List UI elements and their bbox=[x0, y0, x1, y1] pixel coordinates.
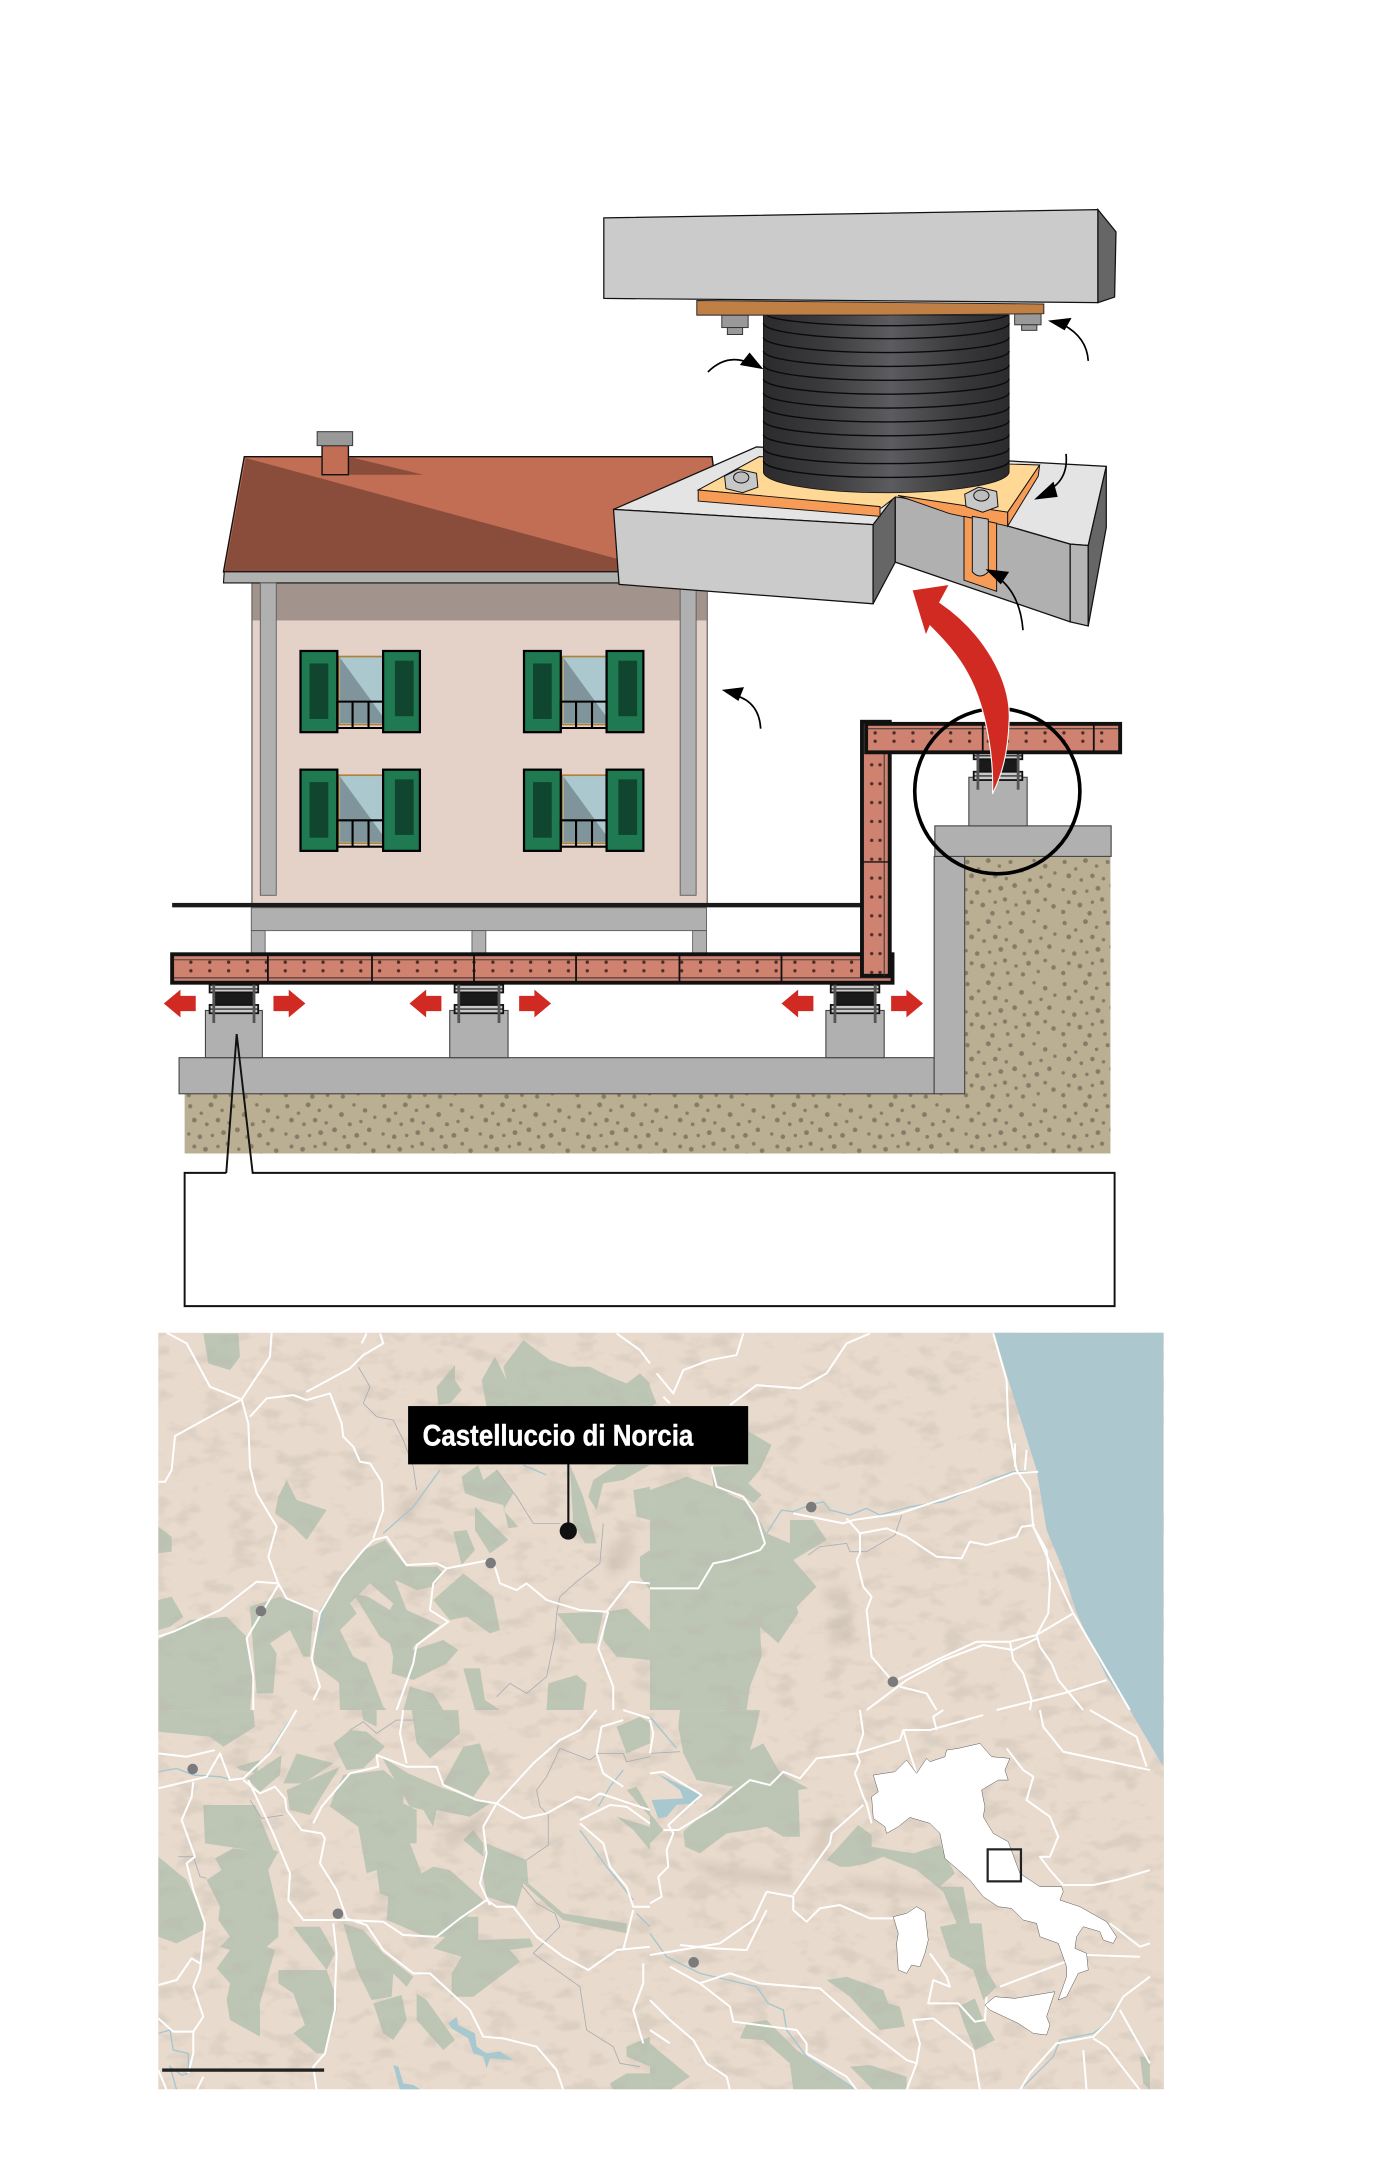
isolator 2 bbox=[455, 979, 503, 1023]
inset location square bbox=[988, 1849, 1021, 1881]
pedestal 2 bbox=[450, 1010, 508, 1058]
relief texture bbox=[158, 1333, 1164, 2089]
upper nuts bbox=[722, 314, 1041, 335]
small arrow: rubber bbox=[708, 353, 763, 372]
steel beam top bbox=[866, 723, 1120, 752]
inset: Italy bbox=[872, 1743, 1117, 2035]
isolator 1 bbox=[210, 979, 258, 1023]
rubber bearing bbox=[763, 315, 1009, 493]
facade wall bbox=[252, 583, 707, 906]
right pillar bbox=[680, 583, 696, 895]
anchor socket bbox=[964, 516, 997, 591]
small arrow: house bbox=[722, 687, 761, 729]
location label: Castelluccio di Norcia bbox=[423, 1420, 694, 1453]
map detail bbox=[158, 1332, 1164, 2090]
ground floor slab line bbox=[172, 903, 863, 907]
rivers bbox=[158, 1465, 1150, 2090]
roads bbox=[158, 1333, 1150, 2090]
red arrow left 1 bbox=[164, 990, 196, 1017]
window upper right bbox=[524, 651, 643, 732]
lakes bbox=[393, 1773, 702, 2090]
red arrow right 3 bbox=[891, 990, 923, 1017]
window lower right bbox=[524, 770, 643, 851]
house bbox=[223, 432, 715, 906]
roof bbox=[223, 457, 715, 572]
window upper left bbox=[301, 651, 420, 732]
hex bolt left bbox=[725, 469, 758, 493]
lower concrete block left bbox=[614, 447, 1106, 604]
scale bar bbox=[162, 2068, 324, 2072]
isolator top bbox=[974, 746, 1022, 790]
foundation bbox=[179, 826, 1111, 1094]
sea bbox=[993, 1330, 1163, 1767]
eaves bbox=[223, 572, 619, 583]
pedestal top bbox=[969, 777, 1027, 826]
mountain shading bbox=[397, 1487, 943, 1900]
location pin bbox=[560, 1462, 577, 1540]
town dots bbox=[187, 1502, 898, 1968]
isolator detail bbox=[604, 210, 1116, 626]
isolator 3 bbox=[831, 979, 879, 1023]
top concrete beam bbox=[604, 210, 1116, 303]
pedestal 1 bbox=[205, 1010, 262, 1058]
small arrow: anchor bbox=[986, 569, 1023, 630]
red arrow right 1 bbox=[273, 990, 305, 1017]
steel beam horizontal bbox=[172, 954, 893, 983]
red arrow right 2 bbox=[519, 990, 551, 1017]
location label bbox=[408, 1406, 748, 1464]
small arrow: plate bbox=[1034, 454, 1066, 500]
small arrow: upper bolt bbox=[1048, 318, 1088, 361]
red arrow left 2 bbox=[409, 990, 441, 1017]
pedestal 3 bbox=[826, 1010, 884, 1058]
boundaries bbox=[178, 1367, 902, 2067]
callout box bbox=[185, 1034, 1115, 1306]
steel beam vertical bbox=[862, 722, 890, 976]
base plate bbox=[698, 457, 1040, 526]
window lower left bbox=[301, 770, 420, 851]
red arrow left 3 bbox=[781, 990, 813, 1017]
upper steel plate bbox=[697, 301, 1044, 315]
hex bolt right bbox=[965, 487, 998, 512]
chimney bbox=[317, 432, 423, 475]
magnifier circle bbox=[915, 709, 1080, 874]
map base bbox=[158, 1333, 1164, 2089]
big red curved arrow bbox=[912, 584, 1009, 794]
soil bbox=[185, 856, 1110, 1153]
base beam under house bbox=[251, 908, 707, 954]
lower concrete block right bbox=[895, 466, 1106, 626]
forest patches bbox=[158, 1333, 1150, 2090]
map bbox=[158, 1330, 1164, 2090]
movement arrows bbox=[164, 990, 923, 1017]
left pillar bbox=[260, 583, 276, 895]
